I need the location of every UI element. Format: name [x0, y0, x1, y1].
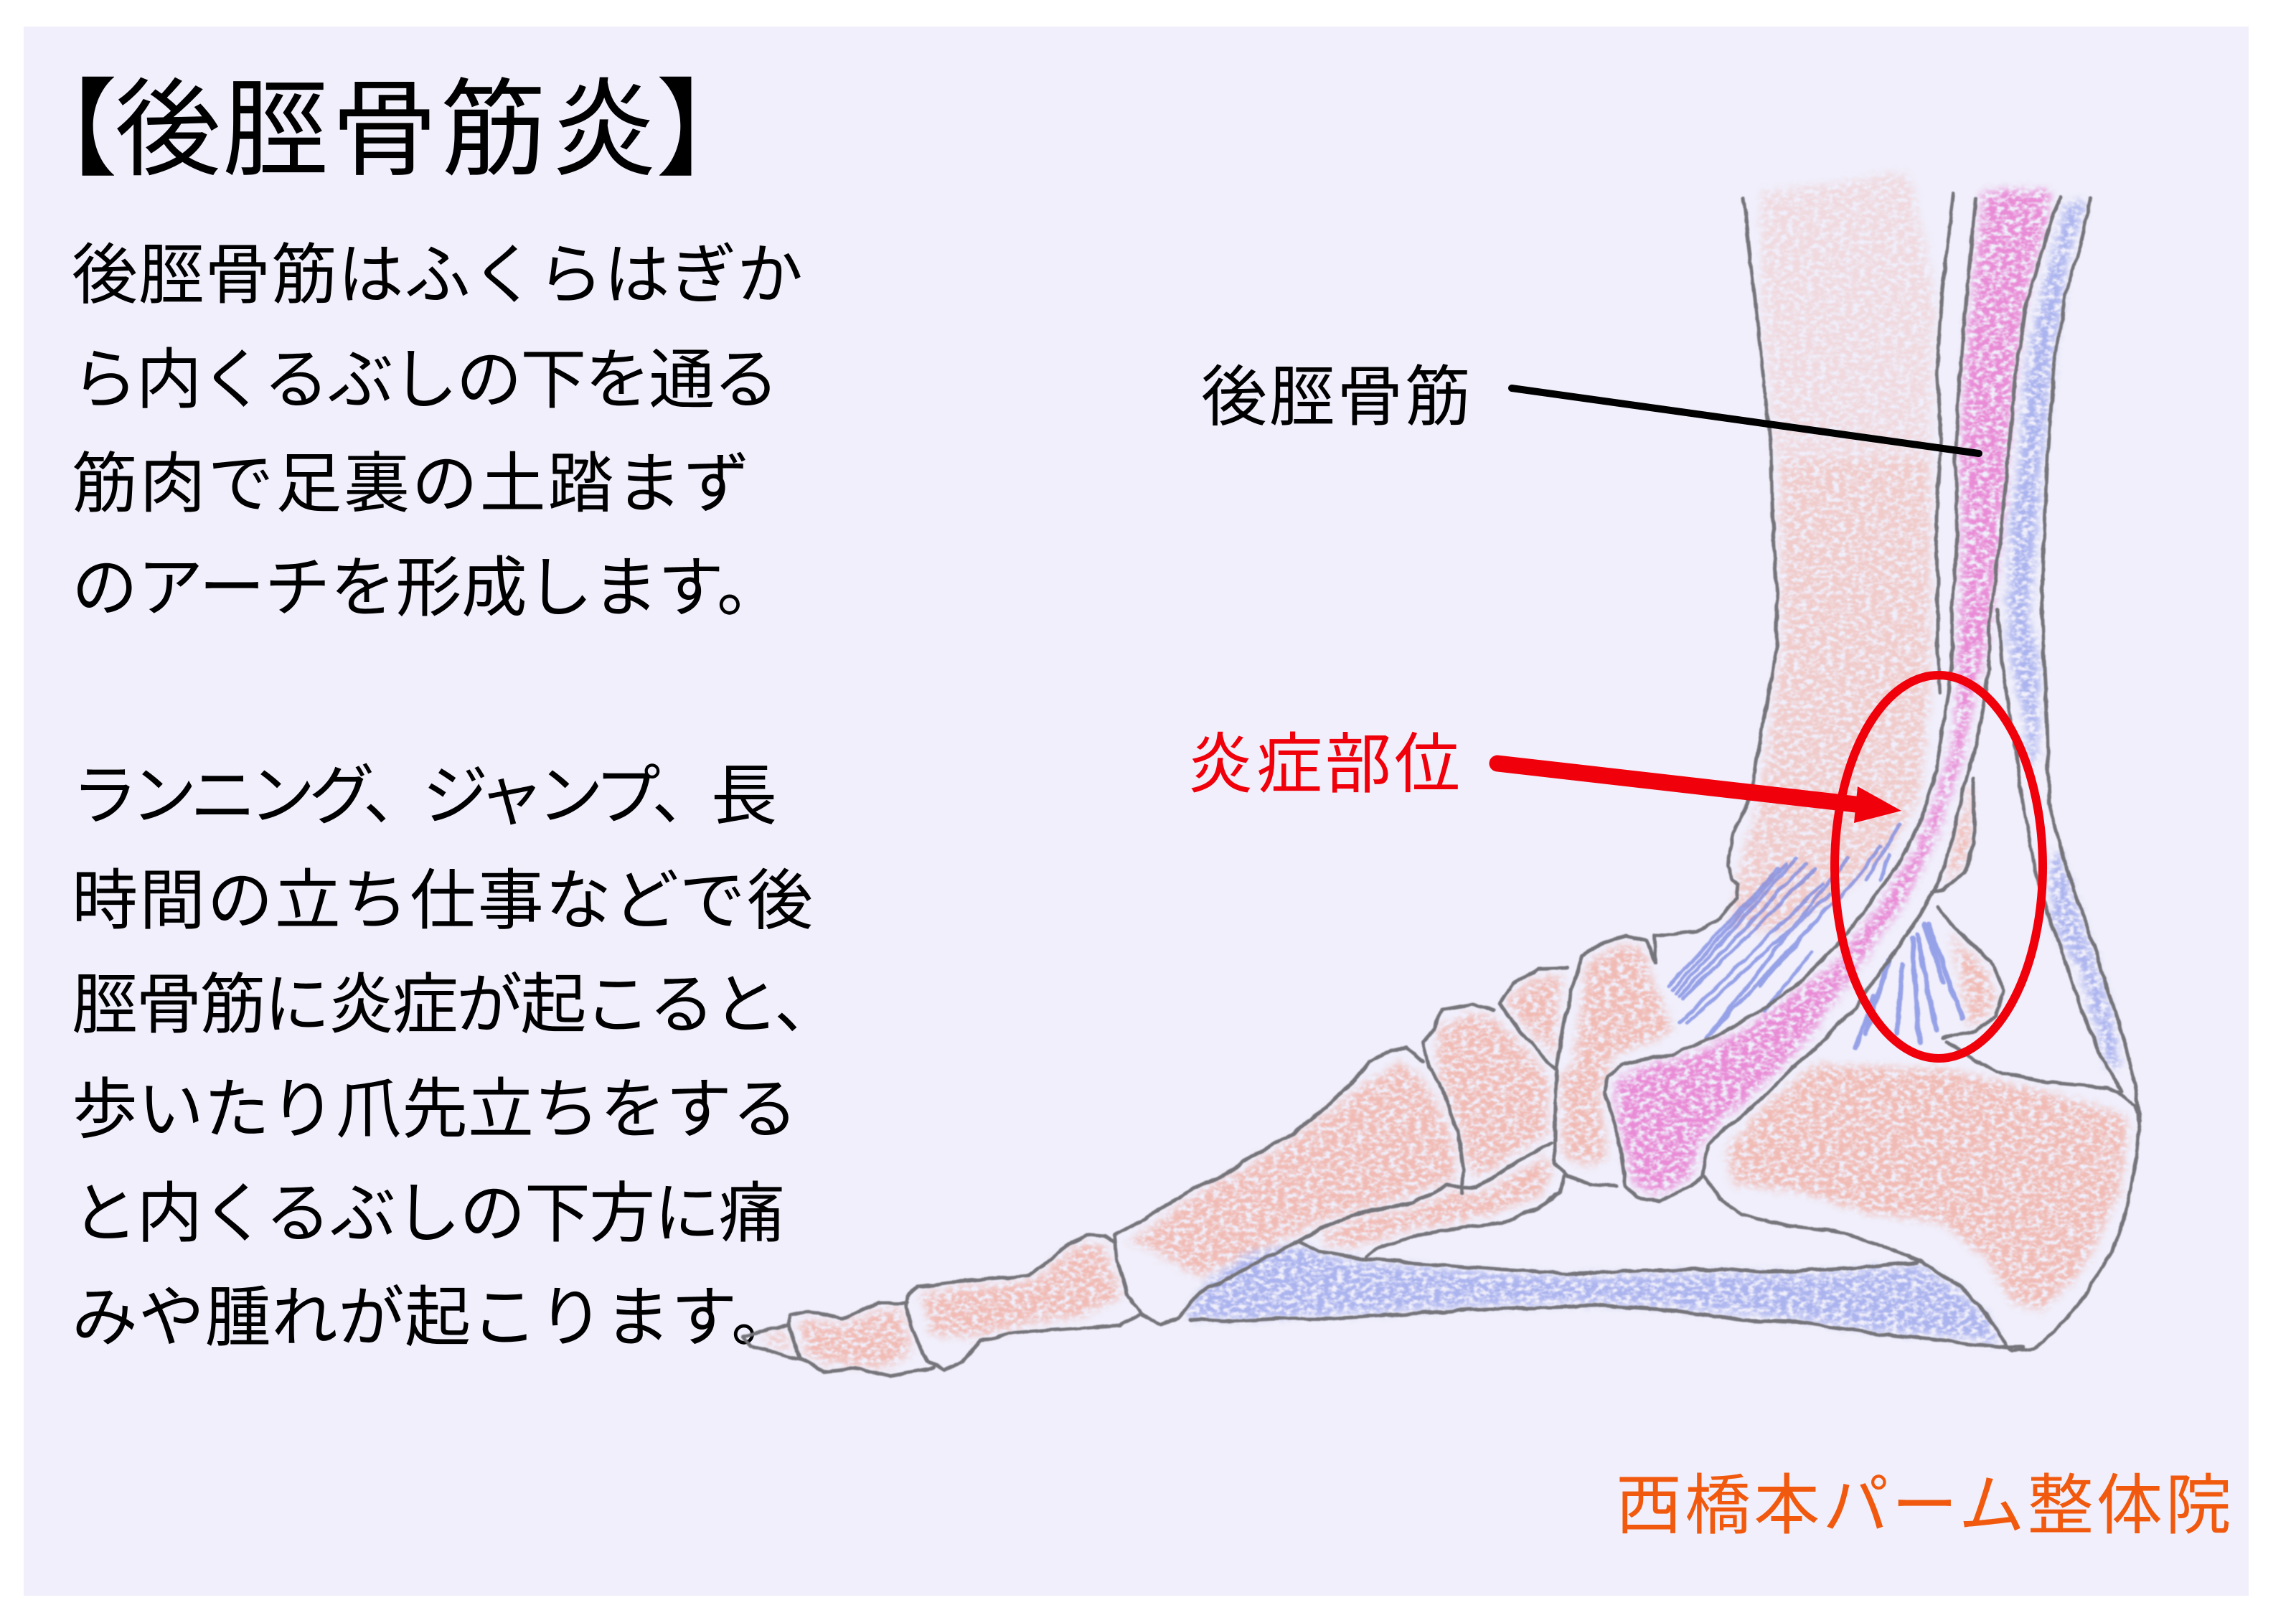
text block: causes and symptoms: 脛骨筋に炎症が起こると、 — [72, 969, 840, 1042]
muscle: posterior tibial tendon in pink — [1614, 190, 2053, 1195]
text block: causes and symptoms: みや腫れが起こります。 — [72, 1281, 797, 1355]
blue tendons and plantar fascia — [1184, 202, 2120, 1342]
text block: what the posterior tibial muscle is: 後脛骨筋はふくらはぎか — [72, 239, 803, 312]
callout ring around inflamed area — [1835, 675, 2043, 1058]
text block: causes and symptoms: 歩いたり爪先立ちをする — [72, 1073, 798, 1147]
text block: what the posterior tibial muscle is: 筋肉で足裏の土踏まず — [72, 448, 750, 521]
label: inflammation site: 炎症部位 — [1187, 728, 1460, 801]
text block: what the posterior tibial muscle is — [72, 239, 803, 625]
salmon bone shading — [761, 172, 2127, 1367]
deltoid ligament fibres — [1669, 825, 1962, 1048]
clinic name: 西橋本パーム整体院 — [1616, 1469, 2231, 1543]
pencil outlines — [743, 193, 2140, 1376]
red arrow to inflammation site — [1497, 763, 1901, 823]
text block: what the posterior tibial muscle is: のアーチを形成します。 — [72, 552, 783, 625]
foot anatomy illustration — [743, 172, 2140, 1376]
text block: causes and symptoms: と内くるぶしの下方に痛 — [72, 1177, 785, 1251]
text block: causes and symptoms: 時間の立ち仕事などで後 — [72, 865, 813, 938]
title: 【後脛骨筋炎】 — [11, 71, 762, 189]
text block: causes and symptoms: ランニング、ジャンプ、長 — [72, 760, 777, 833]
leader line to the muscle — [1512, 388, 1979, 453]
text block: what the posterior tibial muscle is: ら内くるぶしの下を通る — [72, 344, 779, 417]
label: posterior tibial muscle: 後脛骨筋 — [1201, 361, 1471, 434]
text block: causes and symptoms — [72, 760, 840, 1355]
